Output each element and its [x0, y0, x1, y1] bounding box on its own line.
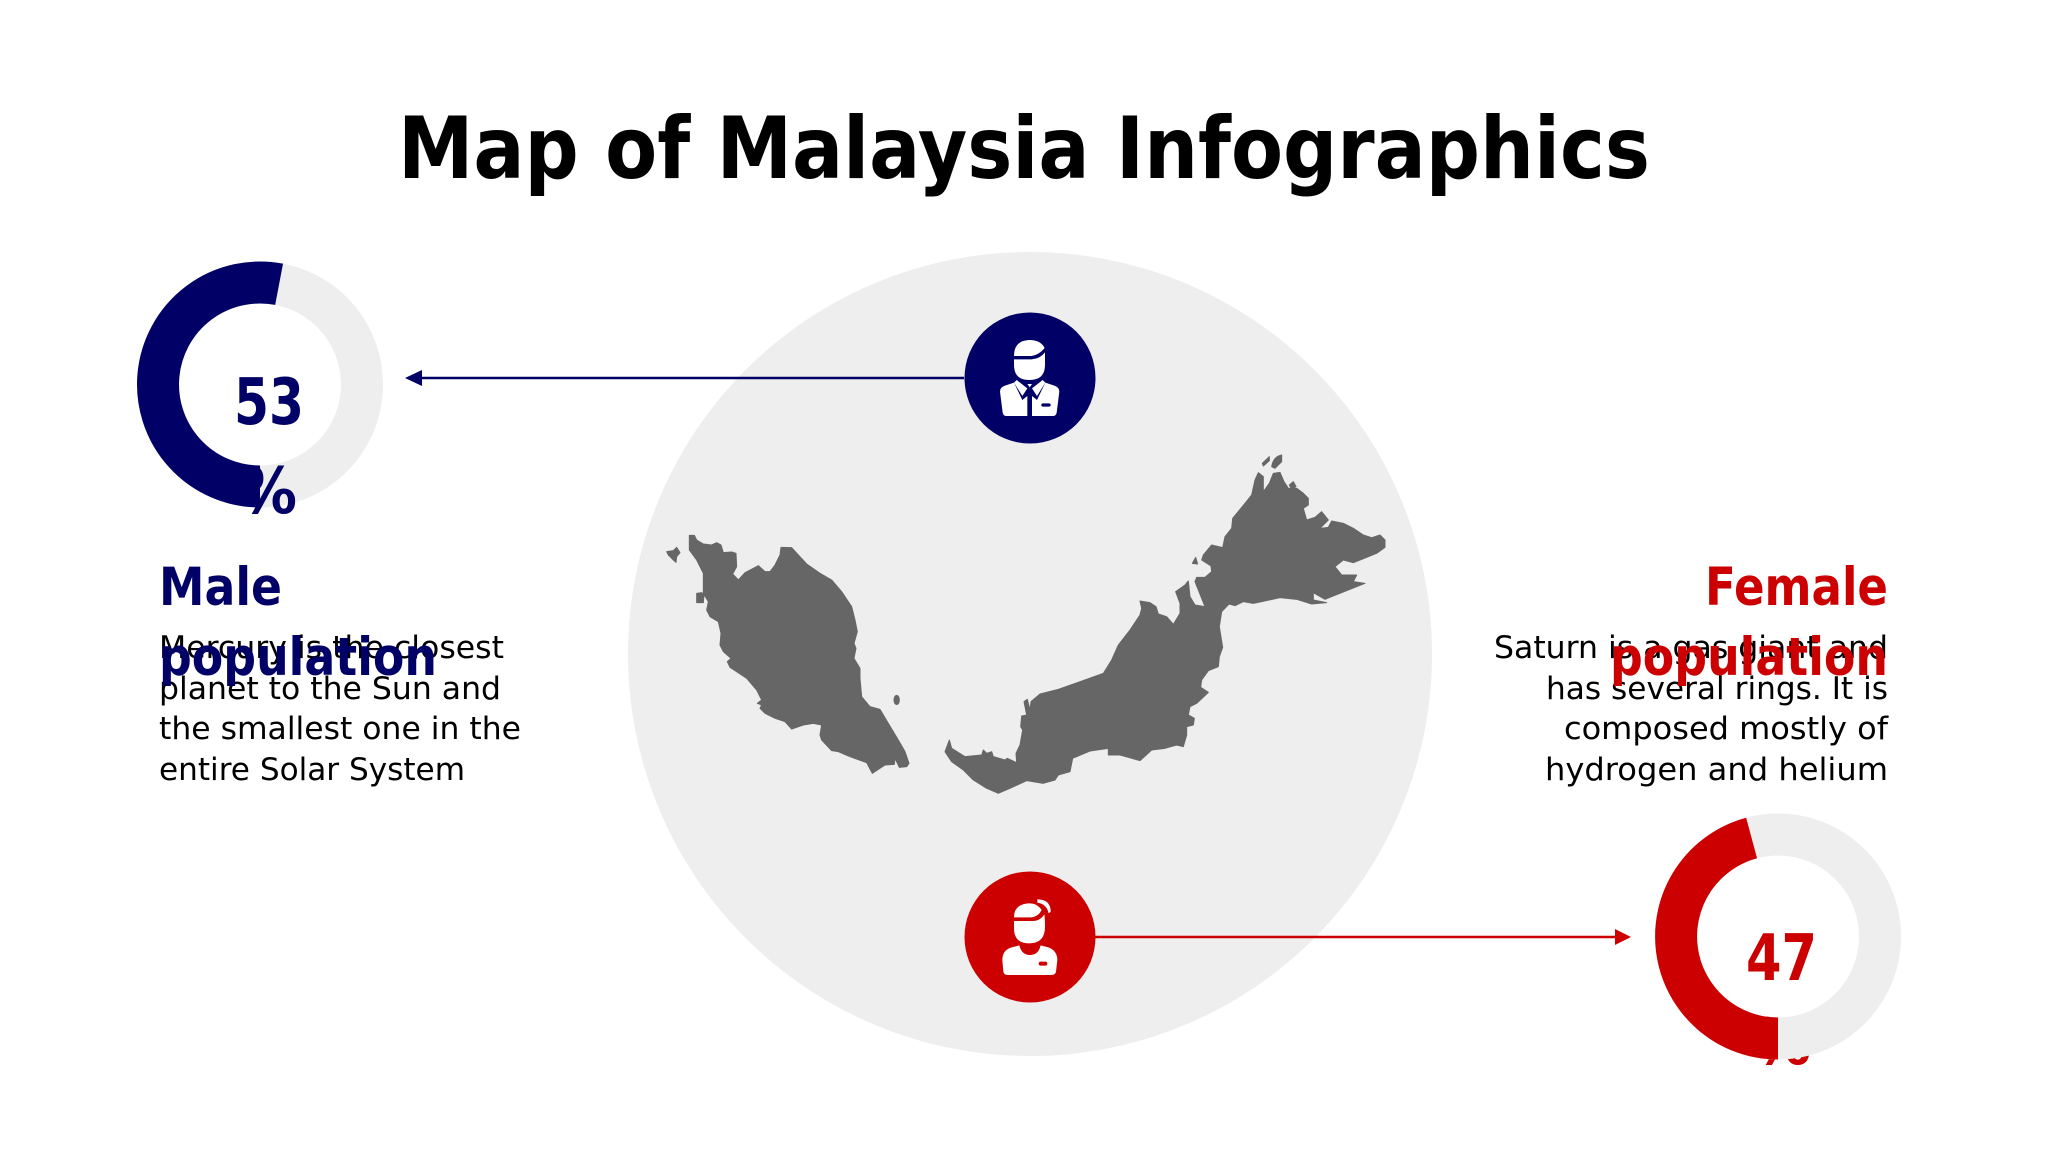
text block: male description: planet to the Sun and: [159, 671, 501, 707]
text block: female description: composed mostly of: [1564, 711, 1889, 747]
heading: female population: [1610, 557, 1888, 688]
heading: female population: population: [1610, 627, 1888, 688]
text block: female description: [1494, 630, 1889, 788]
icon: man: [964, 312, 1096, 444]
donut chart: female 47%: [1676, 834, 1880, 1080]
heading: male population: population: [159, 627, 437, 688]
text block: male description: [159, 630, 521, 788]
background circle: [628, 252, 1432, 1056]
donut chart: male 53%: [158, 282, 362, 529]
text block: female description: Saturn is a gas giant and: [1494, 630, 1888, 666]
donut chart: male 53%: 53: [234, 366, 304, 440]
donut chart: male 53%: %: [239, 455, 297, 529]
donut chart: female 47%: %: [1753, 1006, 1811, 1080]
heading: male population: Male: [159, 557, 282, 618]
text block: male description: the smallest one in the: [159, 711, 521, 747]
map: East Malaysia: [945, 455, 1385, 793]
heading: female population: Female: [1705, 557, 1888, 618]
text block: male description: Mercury is the closest: [159, 630, 504, 666]
map of Malaysia: [667, 455, 1385, 793]
donut chart: female 47%: 47: [1746, 922, 1817, 996]
heading: male population: [159, 557, 437, 688]
icon: woman: [964, 872, 1096, 1002]
arrow: female: [1094, 929, 1631, 945]
arrow: male: [405, 370, 964, 386]
text block: female description: hydrogen and helium: [1545, 752, 1888, 788]
text block: female description: has several rings. It is: [1546, 671, 1888, 707]
map: Peninsular Malaysia: [667, 535, 909, 773]
text block: male description: entire Solar System: [159, 752, 465, 788]
title: Map of Malaysia Infographics: [398, 99, 1650, 199]
